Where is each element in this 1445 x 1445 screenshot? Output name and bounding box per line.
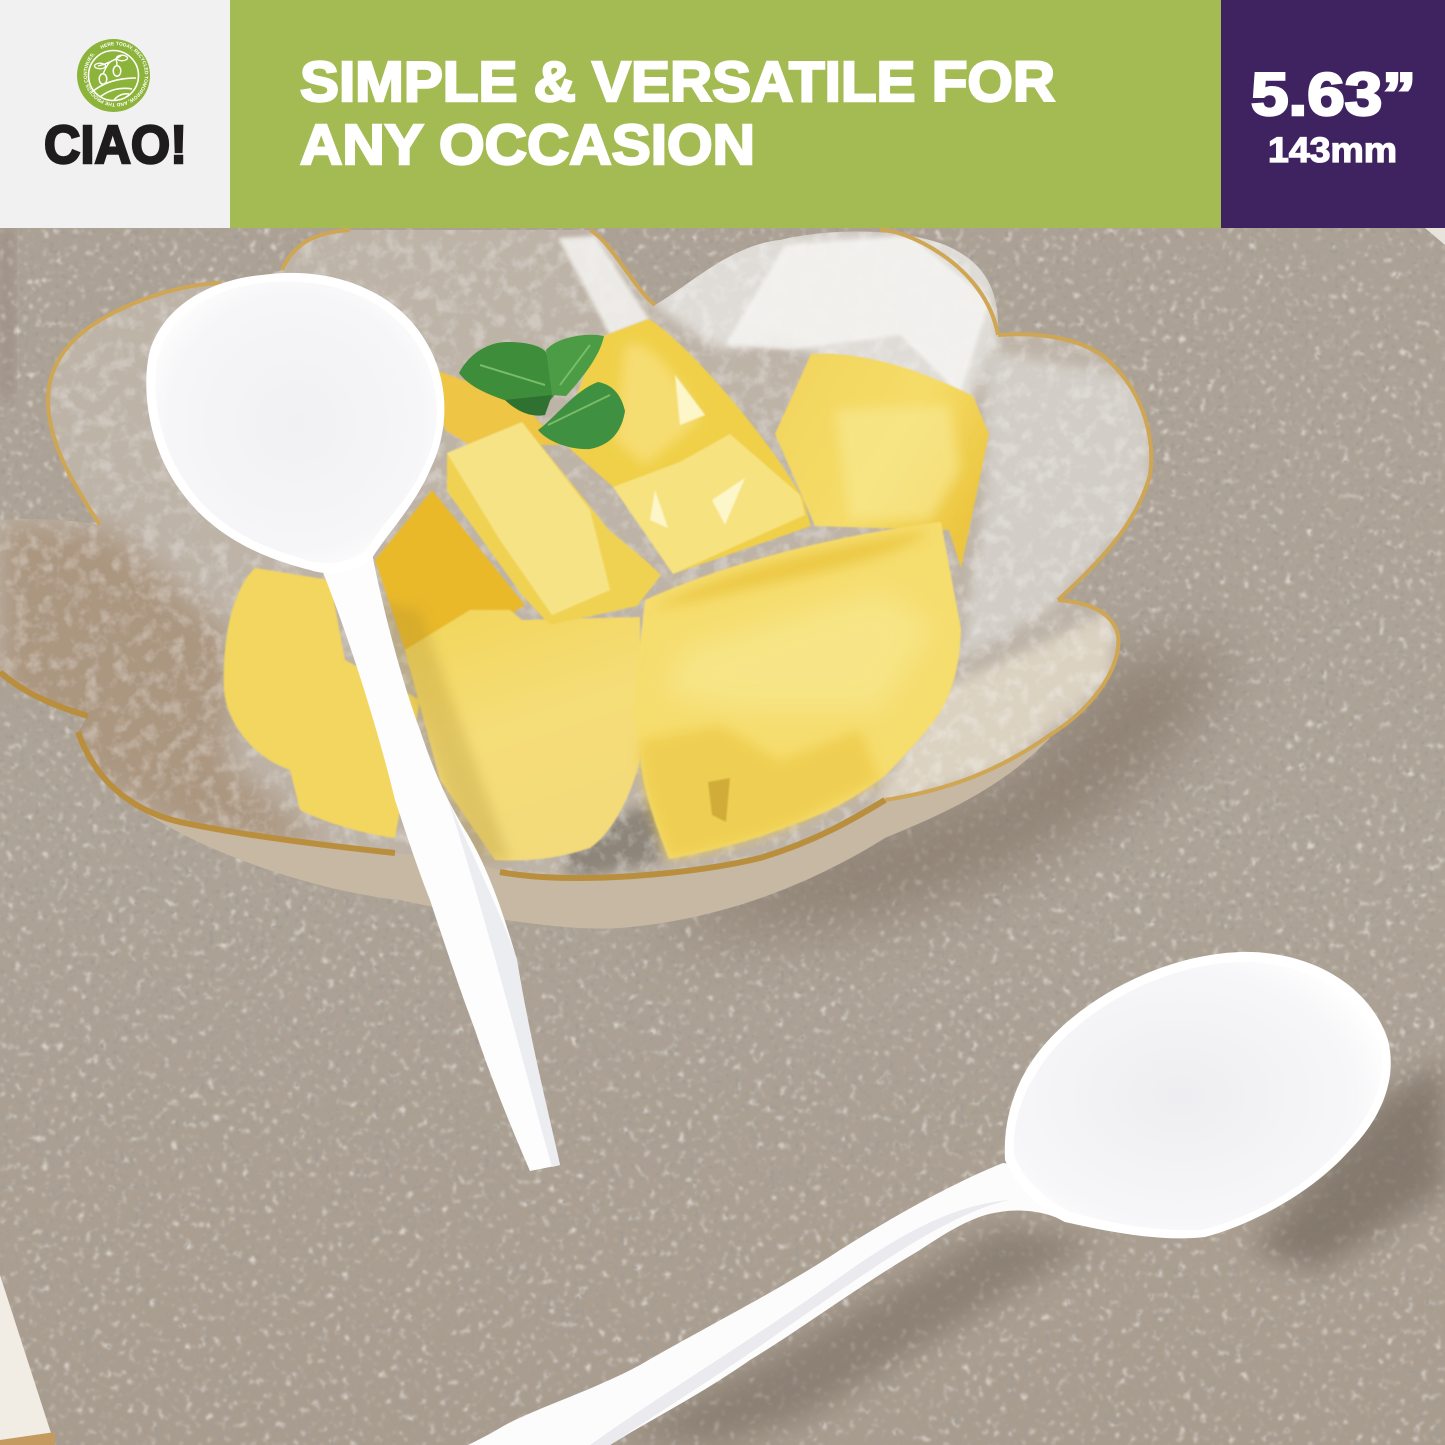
glass bowl with gold rim — [0, 228, 1160, 929]
chunk: right top — [775, 354, 989, 568]
pineapple chunks — [224, 319, 989, 860]
chunk: lower centre — [405, 610, 640, 860]
shadows under bowl and spoons — [620, 640, 1445, 1445]
chunk: large front right — [632, 522, 961, 859]
top chunk light face — [613, 434, 805, 574]
pineapple eye holes — [650, 375, 745, 528]
bowl of spoon — [146, 273, 444, 573]
textured glass highlights — [0, 228, 1160, 888]
bowl interior glass — [0, 230, 1151, 877]
chunk: small front — [447, 422, 661, 625]
bowl lower body — [90, 650, 1050, 929]
header panel: green title banner — [230, 0, 1221, 228]
icon: round green seal: HERE TODAY, RECYCLED TOMORROW, AND THE PROCESS CONTINUES. — [84, 42, 148, 107]
size in millimetres: 143mm — [1268, 131, 1397, 170]
gold rim edge — [48, 230, 1151, 800]
handle — [468, 1163, 1065, 1445]
chunk: back left small — [435, 370, 560, 445]
spoon shadow on pineapple — [375, 600, 510, 860]
bright reflections — [558, 236, 990, 395]
header panel: logo — [0, 0, 230, 228]
wordmark: CIAO! — [44, 115, 187, 175]
mint leaves — [459, 335, 625, 449]
chunk: shadowed middle behind spoon — [375, 490, 525, 650]
size in inches: 5.63” — [1251, 61, 1416, 128]
interior tonal regions — [0, 228, 1160, 888]
title line 1: SIMPLE & VERSATILE FOR — [300, 50, 1055, 114]
title line 2: ANY OCCASION — [300, 113, 755, 177]
handle — [322, 553, 560, 1171]
chunk: far left — [224, 568, 420, 838]
header panel: purple size badge — [1221, 0, 1445, 228]
white spoon in bowl — [146, 273, 560, 1171]
white spoon bottom right — [468, 952, 1391, 1445]
bowl of spoon — [1005, 952, 1391, 1238]
chunk: top centre — [560, 319, 811, 574]
